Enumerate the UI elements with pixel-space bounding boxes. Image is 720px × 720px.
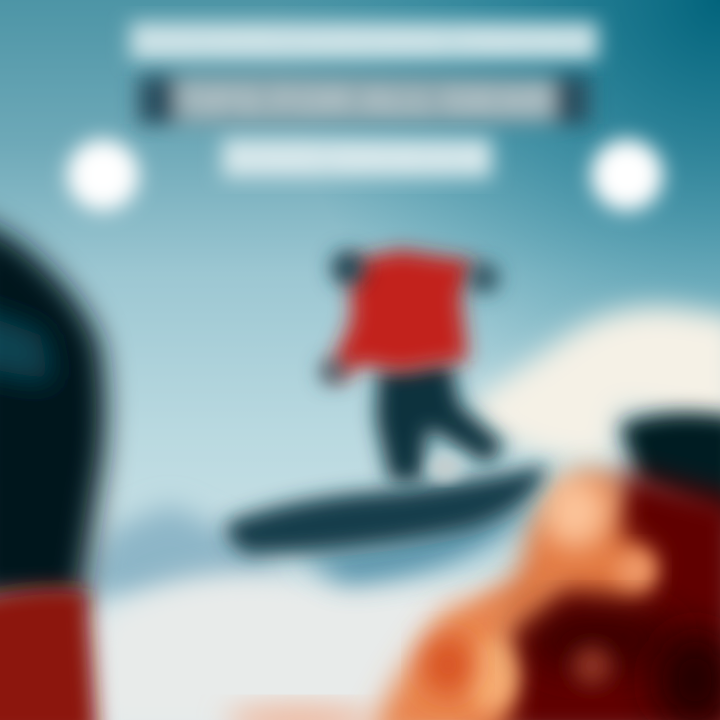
- legs: [376, 360, 505, 482]
- red jacket: [332, 250, 476, 382]
- dark figure left: [0, 215, 106, 600]
- orange highlights bottom right: [225, 470, 720, 720]
- title line 3: [222, 138, 492, 178]
- title line 2 banner: TIPS FOR ALL GEAR: [177, 83, 553, 119]
- title line 1: SNOWBOARDING TRICKS: [136, 24, 590, 62]
- head and gloves: [320, 251, 499, 384]
- snow mound right: [470, 307, 720, 465]
- snow ground: [95, 573, 520, 720]
- dark red mass bottom right: [470, 470, 720, 720]
- dark rock right: [620, 413, 720, 530]
- title line 3: AND SKILLS: [226, 144, 488, 177]
- red jacket bottom left: [0, 587, 98, 720]
- snowboard shadow: [295, 500, 540, 582]
- snowboard: [227, 465, 548, 555]
- snowboarder: [227, 250, 548, 582]
- icon: right white circle: [591, 139, 663, 211]
- icon: left white circle: [67, 139, 139, 211]
- distant mountains: [85, 505, 300, 600]
- knee gap highlight: [429, 456, 461, 480]
- title line 2 banner: [138, 76, 590, 124]
